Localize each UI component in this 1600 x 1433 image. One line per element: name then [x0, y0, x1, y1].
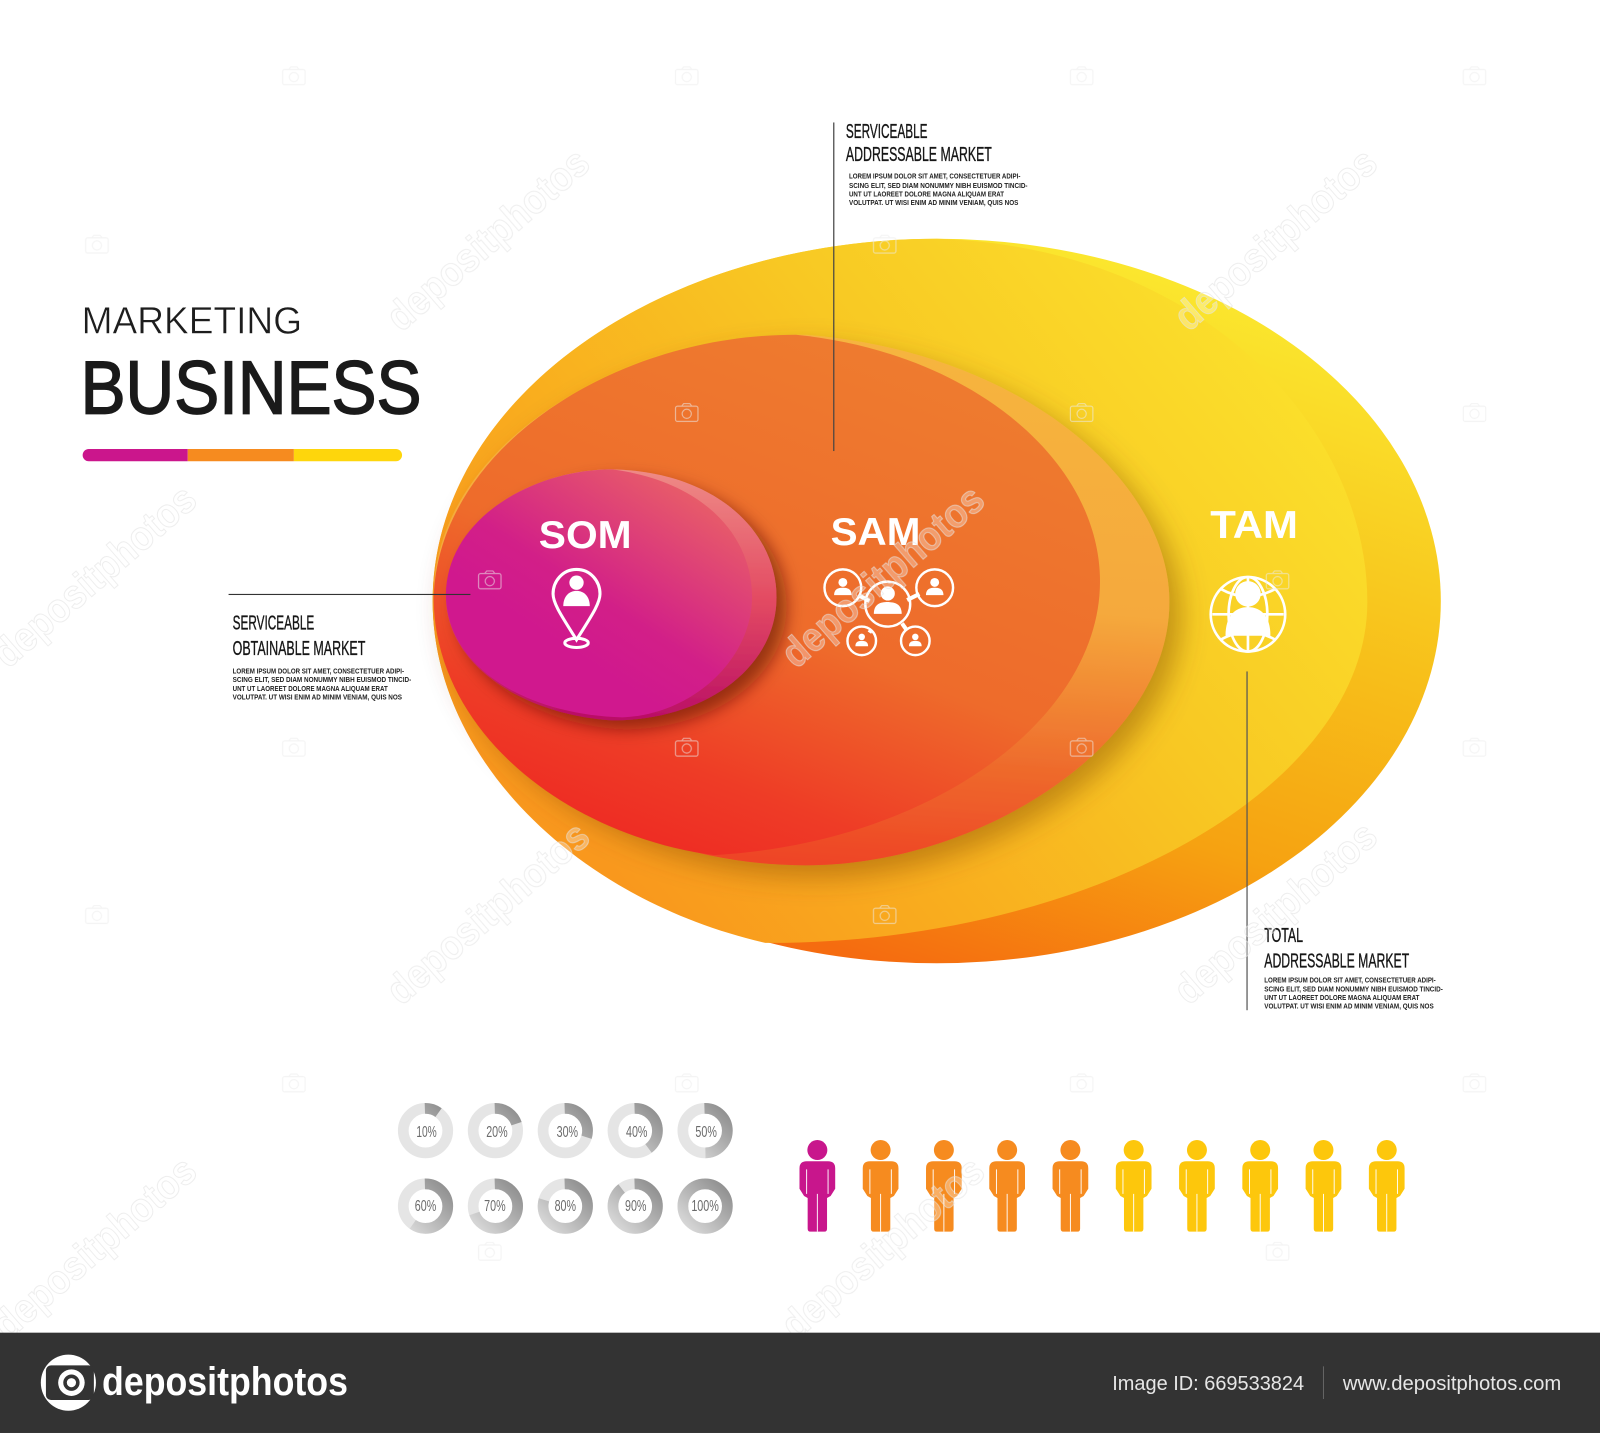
title block — [81, 300, 421, 461]
footer website: www.depositphotos.com — [1342, 1373, 1561, 1395]
callout: total addressable market: TOTAL — [1264, 925, 1303, 947]
SOM front shape — [446, 469, 752, 717]
SOM back shape — [446, 469, 777, 720]
callout: serviceable obtainable market: SCING ELIT, SED DIAM NONUMMY NIBH EUISMOD TINCID- — [233, 675, 412, 684]
callout: serviceable obtainable market: SERVICEABLE — [233, 613, 314, 635]
percentage donut charts: 20% — [486, 1124, 508, 1141]
callout: serviceable addressable market: SCING ELIT, SED DIAM NONUMMY NIBH EUISMOD TINCID- — [849, 181, 1028, 190]
watermark: diagonal text: depositphotos — [1165, 812, 1386, 1013]
callout: total addressable market: VOLUTPAT. UT WISI ENIM AD MINIM VENIAM, QUIS NOS — [1264, 1002, 1434, 1011]
percentage donut charts: 90% — [625, 1198, 646, 1215]
icon: footer logo camera — [41, 1355, 96, 1411]
percentage donut charts: 80% — [555, 1198, 576, 1215]
callout: total addressable market: SCING ELIT, SED DIAM NONUMMY NIBH EUISMOD TINCID- — [1264, 984, 1443, 993]
SOM label: SOM — [539, 514, 632, 557]
title: marketing: MARKETING — [82, 300, 302, 343]
TAM label: TAM — [1210, 504, 1298, 547]
watermark: camera marks — [86, 67, 1486, 1260]
watermark: diagonal text: depositphotos — [772, 1147, 993, 1348]
callout: total addressable market: UNT UT LAOREET DOLORE MAGNA ALIQUAM ERAT — [1264, 993, 1420, 1002]
TAM inner shape — [433, 239, 1367, 943]
callout: serviceable obtainable market: LOREM IPSUM DOLOR SIT AMET, CONSECTETUER ADIPI- — [233, 666, 405, 675]
callout: serviceable addressable market: ADDRESSABLE MARKET — [846, 144, 992, 166]
watermark: diagonal text: depositphotos — [377, 812, 598, 1013]
callout: serviceable addressable market: UNT UT LAOREET DOLORE MAGNA ALIQUAM ERAT — [849, 189, 1005, 198]
callout: total addressable market — [1246, 671, 1443, 1011]
callout: serviceable addressable market — [833, 121, 1028, 451]
TAM nested market diagram — [433, 239, 1441, 963]
watermark: diagonal text — [0, 139, 1386, 1348]
SAM label: SAM — [831, 511, 920, 554]
leader line — [229, 594, 470, 595]
percentage donut charts: 60% — [415, 1198, 436, 1215]
leader line — [1246, 671, 1248, 1010]
icon: location pin with person — [553, 569, 600, 647]
people pictogram row — [799, 1140, 1405, 1232]
callout: serviceable obtainable market: OBTAINABLE MARKET — [233, 638, 365, 660]
percentage donut charts — [403, 1108, 727, 1228]
watermark: diagonal text: depositphotos — [377, 139, 598, 339]
callout: total addressable market: ADDRESSABLE MARKET — [1264, 950, 1409, 972]
percentage donut charts: 100% — [691, 1198, 719, 1215]
SAM back shape — [434, 335, 1169, 865]
TAM outer shape — [433, 239, 1441, 963]
percentage donut charts: 30% — [557, 1124, 578, 1141]
percentage donut charts: 40% — [626, 1124, 647, 1141]
footer band — [0, 1333, 1600, 1433]
percentage donut charts: 50% — [695, 1124, 717, 1141]
watermark: diagonal text: depositphotos — [772, 475, 993, 676]
title underline bar — [83, 449, 402, 461]
SAM front shape — [434, 335, 1100, 855]
footer image id: Image ID: 669533824 — [1112, 1373, 1304, 1395]
title: business: BUSINESS — [81, 346, 421, 430]
callout: serviceable obtainable market: VOLUTPAT. UT WISI ENIM AD MINIM VENIAM, QUIS NOS — [233, 693, 402, 702]
callout: serviceable obtainable market: UNT UT LAOREET DOLORE MAGNA ALIQUAM ERAT — [233, 684, 388, 693]
icon: globe with person — [1211, 577, 1285, 652]
callout: serviceable addressable market: SERVICEABLE — [846, 121, 928, 143]
icon: people network — [824, 569, 953, 655]
watermark: diagonal text: depositphotos — [1165, 139, 1386, 339]
leader line — [833, 122, 834, 451]
percentage donut charts: 10% — [416, 1124, 437, 1141]
percentage donut charts: 70% — [484, 1198, 506, 1215]
callout: serviceable addressable market: LOREM IPSUM DOLOR SIT AMET, CONSECTETUER ADIPI- — [849, 172, 1021, 181]
callout: serviceable obtainable market — [229, 594, 470, 702]
callout: total addressable market: LOREM IPSUM DOLOR SIT AMET, CONSECTETUER ADIPI- — [1264, 976, 1436, 985]
callout: serviceable addressable market: VOLUTPAT. UT WISI ENIM AD MINIM VENIAM, QUIS NOS — [849, 198, 1018, 207]
footer brand name: depositphotos — [102, 1360, 348, 1404]
